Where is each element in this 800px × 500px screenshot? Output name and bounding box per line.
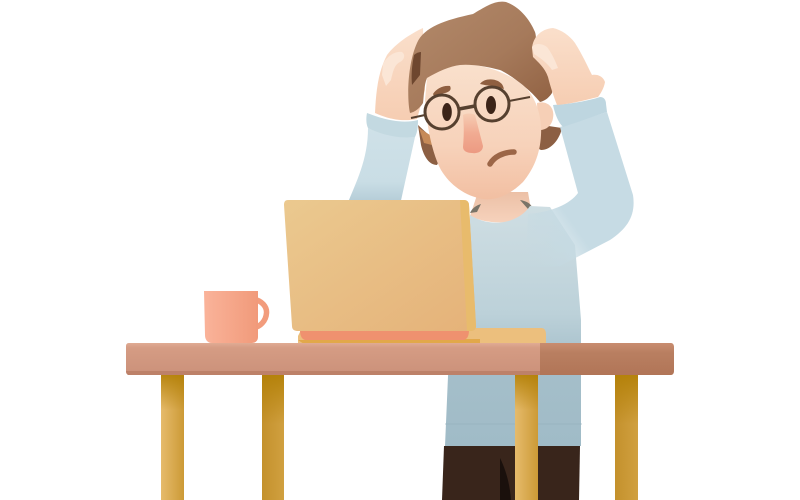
hair back [418, 124, 562, 165]
sweater torso [445, 206, 582, 446]
mug [204, 291, 267, 343]
left arm sleeve [347, 113, 418, 205]
hair top [408, 2, 553, 113]
mouth [490, 152, 514, 164]
pants [442, 446, 580, 500]
eyes [442, 96, 496, 121]
ear [537, 102, 553, 130]
right hand [532, 28, 605, 105]
face [425, 64, 541, 199]
left hand [375, 28, 425, 120]
laptop screen back [284, 200, 476, 331]
laptop base [298, 328, 546, 344]
right arm sleeve [525, 97, 634, 268]
eyebrows [433, 79, 504, 98]
glasses [411, 87, 530, 129]
laptop hinge [300, 330, 469, 340]
nose [463, 114, 483, 153]
neck [470, 192, 535, 222]
table top [126, 343, 674, 375]
table legs [161, 374, 638, 500]
